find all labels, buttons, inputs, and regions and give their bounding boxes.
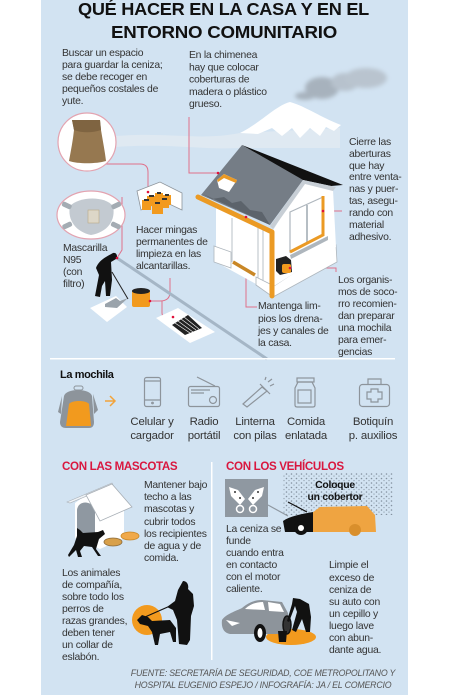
house left wall xyxy=(216,205,272,292)
icon: covered car xyxy=(283,502,376,536)
text: mantenga limpios: la casa. xyxy=(258,338,292,349)
text: mantener bajo techo: los recipientes xyxy=(144,529,207,540)
text: mantener bajo techo: cubrir todos xyxy=(144,517,195,528)
icon: phone xyxy=(144,378,160,406)
text: mantener bajo techo: comida. xyxy=(144,553,179,564)
icon: backpack xyxy=(58,386,98,428)
text: coloque un cobertor xyxy=(308,480,363,503)
backpack item labels: Radio xyxy=(190,416,218,428)
text: buscar un espacio: yute. xyxy=(62,96,83,107)
text: animales de compania: sobre todo los xyxy=(62,592,124,603)
text: buscar un espacio: para guardar la ceniza; xyxy=(62,60,163,71)
house backpack xyxy=(276,256,292,275)
house roof xyxy=(201,145,303,225)
text: limpie el exceso: con abun- xyxy=(329,633,373,644)
source note: HOSPITAL EUGENIO ESPEJO / INFOGRAFÍA: JA / EL COMERCIO xyxy=(135,680,392,690)
text: hacer mingas: limpieza en las xyxy=(136,249,201,260)
text: limpie el exceso: su auto con xyxy=(329,597,380,608)
house window xyxy=(290,197,323,252)
text: cierre las aberturas: que hay xyxy=(349,161,385,172)
text: organismos de socorro: dan preparar xyxy=(338,311,395,322)
icon: orange sacks xyxy=(137,182,182,214)
text: animales de compania: deben tener xyxy=(62,628,116,639)
text: organismos de socorro: Los organis- xyxy=(338,275,392,286)
text: limpie el exceso: dante agua. xyxy=(329,645,381,656)
text: hacer mingas: permanentes de xyxy=(136,237,208,248)
backpack item labels xyxy=(130,416,398,442)
background panel xyxy=(41,0,408,695)
icon: first aid kit xyxy=(360,379,390,406)
backpack item labels: p. auxilios xyxy=(349,430,398,442)
text: animales de compania: eslabón. xyxy=(62,652,99,663)
ash tile with worker and shovel xyxy=(90,253,128,322)
text: organismos de socorro: mos de soco- xyxy=(338,287,397,298)
icon: jar xyxy=(295,378,315,407)
text: organismos de socorro: una mochila xyxy=(338,323,392,334)
text: buscar un espacio: Buscar un espacio xyxy=(62,48,144,59)
text: buscar un espacio: se debe recoger en xyxy=(62,72,148,83)
text: cierre las aberturas: adhesivo. xyxy=(349,232,391,243)
text: animales de compania: Los animales xyxy=(62,568,120,579)
text: la ceniza se funde: con el motor xyxy=(226,572,281,583)
house illustration xyxy=(198,145,343,297)
text: organismos de socorro: rro recomien- xyxy=(338,299,397,310)
background volcano with smoke xyxy=(115,68,387,148)
text: la ceniza se funde: caliente. xyxy=(226,584,262,595)
house gable wall xyxy=(272,181,336,286)
title xyxy=(78,0,370,42)
text: cierre las aberturas: Cierre las xyxy=(349,137,391,148)
text: chimenea: madera o plástico xyxy=(189,87,267,98)
icon: orange arrow xyxy=(105,396,115,406)
text: mascarilla: N95 xyxy=(63,255,82,266)
backpack item labels: Botiquín xyxy=(353,416,393,428)
heading: la mochila: La mochila xyxy=(60,369,115,381)
text: limpie el exceso: exceso de xyxy=(329,573,375,584)
house drain xyxy=(233,262,255,275)
text: chimenea: grueso. xyxy=(189,99,222,110)
text: limpie el exceso: ceniza de xyxy=(329,585,372,596)
text: la ceniza se funde: La ceniza se xyxy=(226,524,282,535)
source note: FUENTE: SECRETARÍA DE SEGURIDAD, COE METROPOLITANO Y xyxy=(131,668,397,678)
backpack item labels: Celular y xyxy=(130,416,174,428)
icon: washing car xyxy=(222,598,316,645)
backpack item labels: cargador xyxy=(130,430,174,442)
text: cierre las aberturas: entre venta- xyxy=(349,172,401,183)
icon: dog house with dog and bowls xyxy=(67,483,139,557)
text: mantener bajo techo: mascotas y xyxy=(144,504,195,515)
divider xyxy=(50,358,395,360)
icon: sewer grate tile xyxy=(156,308,215,343)
backpack item labels: con pilas xyxy=(233,430,277,442)
icon: flashlight xyxy=(243,377,274,407)
callout dots xyxy=(116,172,324,318)
spray of ash xyxy=(283,473,393,515)
source note xyxy=(131,668,397,690)
text: cierre las aberturas: material xyxy=(349,220,384,231)
icon: person walking dog xyxy=(132,581,194,645)
text: animales de compania: perros de xyxy=(62,604,104,615)
text: limpie el exceso: Limpie el xyxy=(329,560,368,571)
text: organismos de socorro: gencias xyxy=(338,347,372,358)
text: cierre las aberturas: aberturas xyxy=(349,149,391,160)
text: hacer mingas: alcantarillas. xyxy=(136,261,190,272)
heading: con los vehiculos: CON LOS VEHÍCULOS xyxy=(226,460,344,473)
text: mantener bajo techo: Mantener bajo xyxy=(144,480,208,491)
icon: radio xyxy=(188,377,220,406)
text: animales de compania: razas grandes, xyxy=(62,616,127,627)
text: organismos de socorro: para emer- xyxy=(338,335,386,346)
text: cierre las aberturas: nas y puer- xyxy=(349,184,398,195)
text: coloque un cobertor: Coloque xyxy=(315,480,355,491)
text: mantener bajo techo: de agua y de xyxy=(144,541,202,552)
text: mascarilla: Mascarilla xyxy=(63,243,108,254)
text: mantenga limpios: jes y canales de xyxy=(257,326,329,337)
house gutter xyxy=(198,197,272,296)
text: animales de compania: de compañía, xyxy=(62,580,122,591)
text: la ceniza se funde: funde xyxy=(226,536,251,547)
text: mascarilla: (con xyxy=(63,267,83,278)
text: coloque un cobertor: un cobertor xyxy=(308,492,363,503)
text: la ceniza se funde: cuando entra xyxy=(226,548,284,559)
text: cierre las aberturas: rando con xyxy=(349,208,393,219)
icon: N95 mask xyxy=(57,191,125,239)
icon: pistons panel xyxy=(225,479,288,517)
title: ENTORNO COMUNITARIO xyxy=(111,22,337,42)
text: chimenea: En la chimenea xyxy=(189,50,258,61)
text: chimenea: coberturas de xyxy=(189,74,250,86)
backpack item labels: Linterna xyxy=(235,416,276,428)
backpack item labels: portátil xyxy=(188,430,220,442)
house chimney xyxy=(217,174,237,192)
text: limpie el exceso: luego lave xyxy=(329,621,374,632)
icon: bucket xyxy=(132,288,150,307)
callout lines xyxy=(100,117,342,317)
text: hacer mingas: Hacer mingas xyxy=(136,225,197,236)
text: mantenga limpios: pios los drena- xyxy=(258,314,322,325)
text: mantenga limpios: Mantenga lim- xyxy=(258,301,321,312)
text: limpie el exceso: un cepillo y xyxy=(329,609,379,620)
text: chimenea: hay que colocar xyxy=(189,62,259,74)
text: la ceniza se funde: en contacto xyxy=(226,560,277,571)
icon: jute sack in circle xyxy=(58,113,116,171)
backpack item labels: Comida xyxy=(287,416,326,428)
text: mascarilla: filtro) xyxy=(63,279,84,290)
text: animales de compania: un collar de xyxy=(62,640,113,651)
backpack item labels: enlatada xyxy=(285,430,328,442)
text: cierre las aberturas: tas, asegu- xyxy=(349,196,398,207)
text: buscar un espacio: pequeños costales de xyxy=(62,84,159,95)
house plinth xyxy=(214,246,231,268)
divider: vertical xyxy=(211,462,212,660)
street line xyxy=(117,258,267,359)
heading: con las mascotas: CON LAS MASCOTAS xyxy=(62,460,178,473)
text: mantener bajo techo: techo a las xyxy=(144,492,192,503)
